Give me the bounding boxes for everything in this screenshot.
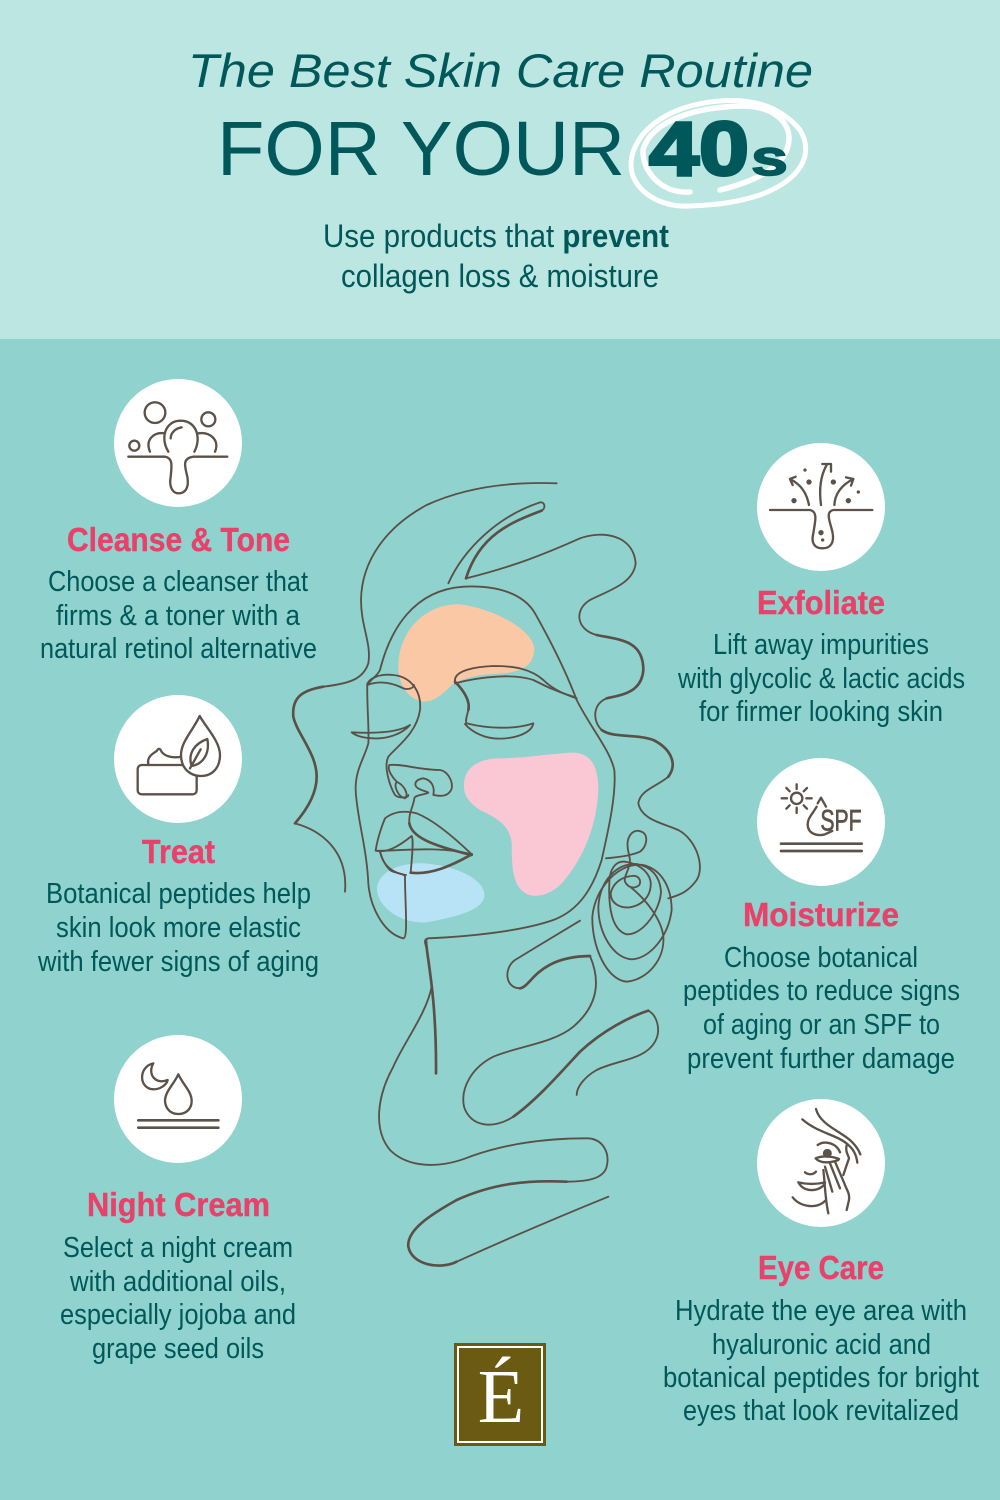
body text: Choose botanical bbox=[724, 942, 918, 974]
title: FOR YOUR bbox=[217, 106, 625, 192]
panel: moisturize bbox=[683, 758, 960, 1075]
body text bbox=[40, 566, 317, 665]
icon: sun, drop and SPF bbox=[757, 758, 885, 886]
panel: night cream bbox=[60, 1035, 296, 1365]
body text: Choose a cleanser that bbox=[48, 566, 308, 598]
icon: pore with arrows bbox=[757, 443, 885, 571]
icon: face with hand at eye bbox=[757, 1099, 885, 1227]
face and hair lines bbox=[293, 483, 700, 948]
face line illustration bbox=[293, 483, 700, 1266]
panel: cleanse and tone bbox=[40, 379, 317, 665]
body text: with fewer signs of aging bbox=[37, 946, 319, 978]
body text: hyaluronic acid and bbox=[712, 1329, 931, 1361]
body text: firms & a toner with a bbox=[56, 600, 301, 632]
body text bbox=[663, 1295, 979, 1427]
body text: Lift away impurities bbox=[713, 629, 929, 661]
panel: exfoliate bbox=[677, 443, 965, 728]
body text bbox=[677, 629, 965, 728]
subtitle bbox=[323, 218, 669, 294]
icon: cream jar and leaf drop bbox=[114, 695, 242, 823]
colour blob: peach forehead bbox=[398, 604, 534, 702]
body text bbox=[60, 1232, 296, 1365]
body text: for firmer looking skin bbox=[699, 696, 943, 728]
colour blob: blue chin bbox=[377, 863, 484, 922]
body text bbox=[37, 878, 319, 978]
heading: Treat bbox=[142, 833, 215, 870]
icon: sun, drop and SPF: SPF bbox=[820, 804, 862, 837]
body text: with additional oils, bbox=[69, 1266, 286, 1298]
body text: Botanical peptides help bbox=[46, 878, 311, 910]
highlighted 40s with scribble circle: 40 bbox=[649, 107, 749, 192]
highlighted 40s with scribble circle: s bbox=[751, 130, 788, 186]
body text: prevent further damage bbox=[687, 1043, 955, 1075]
logo: É bbox=[478, 1355, 524, 1439]
subtitle: Use products that prevent bbox=[323, 218, 669, 254]
icon: foam cleanser bbox=[114, 379, 242, 507]
heading: Exfoliate bbox=[757, 584, 885, 621]
body text: Select a night cream bbox=[63, 1232, 293, 1264]
panel: eye care bbox=[663, 1099, 979, 1427]
heading: Moisturize bbox=[743, 896, 899, 933]
body text: natural retinol alternative bbox=[40, 633, 317, 665]
body text: eyes that look revitalized bbox=[683, 1395, 959, 1427]
heading: Cleanse & Tone bbox=[67, 521, 290, 558]
highlighted 40s with scribble circle bbox=[631, 100, 806, 206]
header band bbox=[0, 0, 1000, 339]
body text: of aging or an SPF to bbox=[703, 1009, 940, 1041]
body text bbox=[683, 942, 960, 1075]
body text: especially jojoba and bbox=[60, 1299, 296, 1331]
heading: Night Cream bbox=[87, 1186, 270, 1223]
logo bbox=[454, 1343, 546, 1446]
title bbox=[188, 44, 813, 192]
body text: grape seed oils bbox=[92, 1333, 264, 1365]
neck and shoulder lines bbox=[379, 921, 658, 1266]
body text: peptides to reduce signs bbox=[683, 975, 960, 1007]
title: The Best Skin Care Routine bbox=[188, 44, 813, 97]
panel: treat bbox=[37, 695, 319, 978]
body text: Hydrate the eye area with bbox=[675, 1295, 967, 1327]
subtitle: collagen loss & moisture bbox=[341, 258, 659, 294]
icon: moon and drop bbox=[114, 1035, 242, 1163]
earring bbox=[592, 831, 672, 982]
body text: skin look more elastic bbox=[56, 912, 301, 944]
colour blob: pink cheek bbox=[464, 753, 598, 896]
heading: Eye Care bbox=[758, 1249, 884, 1286]
